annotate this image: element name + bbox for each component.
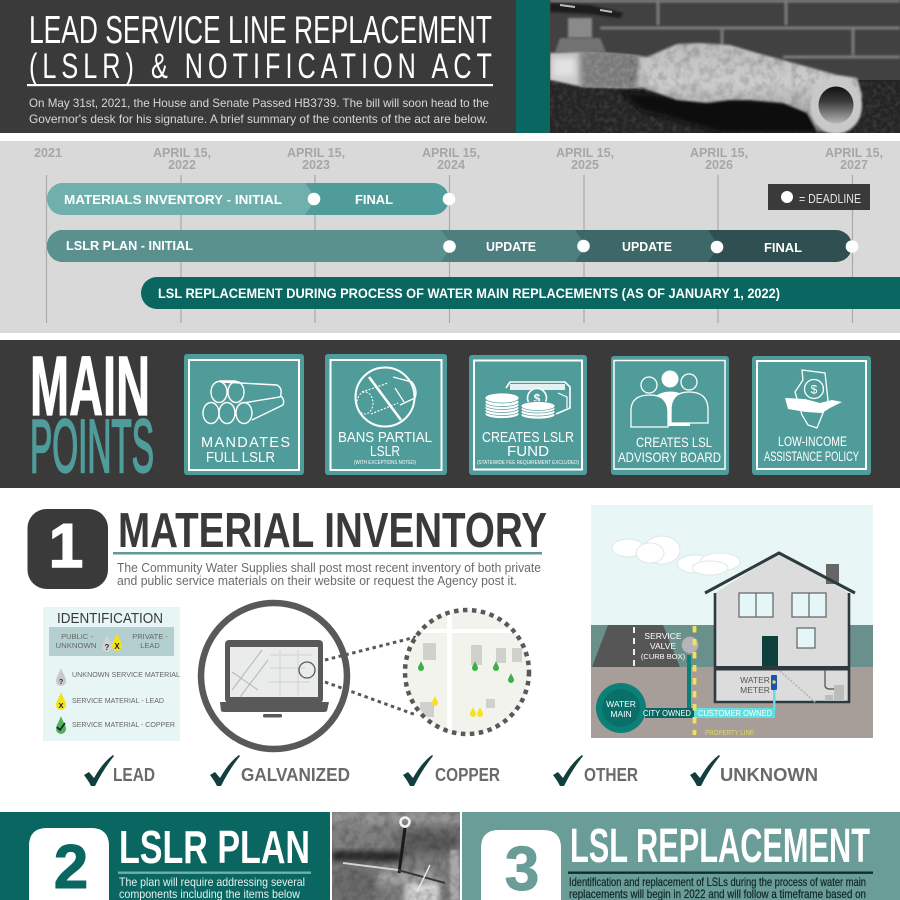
bar: LSLR plan: FINAL (764, 240, 802, 255)
heading: main points: MAIN (30, 339, 150, 433)
illustration: house service line diagram (591, 505, 873, 738)
road (592, 625, 680, 667)
legend: identification: X (114, 642, 120, 651)
icon: prohibited pipe (356, 368, 416, 426)
checklist: material types: GALVANIZED (241, 765, 350, 785)
timeline year labels: 2024 (437, 158, 465, 172)
connector: zoom lines (325, 637, 416, 715)
illustration: house service line diagram: WATER (740, 675, 770, 685)
card: mandates full LSLR: MANDATES (201, 435, 290, 451)
timeline year labels: APRIL 15, (556, 146, 614, 160)
diagram labels (606, 631, 772, 719)
house (715, 553, 849, 702)
legend: identification: ? (59, 677, 64, 686)
panel: main points: POINTS (30, 404, 154, 488)
card: creates LSLR fund: FUND (507, 444, 549, 460)
badge: number 1: 1 (49, 512, 83, 581)
card: creates LSLR fund (469, 355, 587, 475)
diagram labels: SERVICE (644, 631, 682, 641)
legend: deadline: = DEADLINE (799, 191, 861, 206)
icon: three people (631, 370, 708, 427)
card: bans partial LSLR: BANS PARTIAL (338, 430, 432, 446)
bar: LSL replacement (141, 277, 900, 309)
legend: identification: PRIVATE - (132, 632, 168, 641)
legend: identification (43, 607, 180, 741)
legend: identification: IDENTIFICATION (57, 610, 163, 627)
bar: LSLR plan: LSLR PLAN - INITIAL (66, 238, 193, 253)
legend: identification: X (58, 701, 64, 710)
water main (596, 683, 646, 733)
diagram labels: CITY OWNED (643, 708, 691, 718)
legend: identification: ? (105, 643, 110, 652)
panel: material inventory (28, 504, 873, 786)
clouds (612, 536, 740, 575)
map detail: dotted magnifier (405, 610, 530, 735)
diagram labels: VALVE (650, 641, 676, 651)
intro text: Governor's desk for his signature. A brief summary of the contents of the act are below. (29, 112, 488, 126)
title (27, 9, 493, 86)
timeline year labels (34, 146, 883, 172)
icon: state outline with hand and dollar: $ (811, 382, 818, 396)
legend: identification: SERVICE MATERIAL - COPPER (72, 720, 175, 729)
panel: header (0, 0, 900, 140)
heading: main points (30, 339, 154, 488)
diagram labels: CUSTOMER OWNED (698, 708, 772, 718)
panel: main points (0, 339, 900, 488)
diagram labels: (CURB BOX) (641, 652, 686, 661)
description text: and public service materials on their website or request the Agency post it. (117, 574, 517, 588)
bar: LSL replacement: LSL REPLACEMENT DURING PROCESS OF WATER MAIN REPLACEMENTS (AS OF JANUARY 1, 2022) (158, 285, 780, 301)
description text (119, 875, 305, 900)
icon: laptop with online map (201, 603, 347, 749)
badge: number 3 (481, 830, 561, 900)
description text: The plan will require addressing several (119, 875, 305, 889)
description text: The Community Water Supplies shall post most recent inventory of both private (117, 561, 541, 575)
checklist: material types: COPPER (435, 765, 500, 785)
title: LEAD SERVICE LINE REPLACEMENT (29, 9, 492, 52)
timeline year labels: 2025 (571, 158, 599, 172)
pipe opening (810, 78, 862, 134)
legend: identification: UNKNOWN (56, 641, 96, 650)
timeline year labels: 2026 (705, 158, 733, 172)
panel: timeline (0, 141, 900, 333)
card: creates LSLR fund: CREATES LSLR (482, 430, 574, 446)
bar: LSLR plan: UPDATE (486, 239, 536, 254)
timeline year labels: APRIL 15, (690, 146, 748, 160)
heading: LSLR plan: LSLR PLAN (119, 821, 310, 873)
icon: cash and coins: $ (534, 392, 541, 406)
illustration: house service line diagram: METER (740, 685, 770, 695)
faucet (568, 18, 592, 38)
photo: excavated service line (332, 812, 460, 900)
card: bans partial LSLR (325, 354, 447, 475)
checklist: material types (84, 755, 818, 786)
panel: LSL replacement (462, 812, 900, 900)
bar: materials inventory (47, 183, 455, 215)
legend: deadline (768, 184, 870, 210)
intro text (29, 96, 489, 126)
timeline year labels: APRIL 15, (153, 146, 211, 160)
card: low-income assistance policy (752, 356, 871, 475)
badge: number 2 (29, 828, 109, 900)
diagram labels: MAIN (610, 709, 632, 719)
title: (LSLR) & NOTIFICATION ACT (29, 47, 492, 86)
intro text: On May 31st, 2021, the House and Senate Passed HB3739. The bill will soon head to the (29, 96, 489, 110)
legend: identification: LEAD (140, 641, 160, 650)
water pipes (687, 655, 691, 710)
card: creates LSL advisory board: ADVISORY BOARD (618, 449, 721, 465)
timeline year labels: 2023 (302, 158, 330, 172)
legend: identification: UNKNOWN SERVICE MATERIAL (72, 670, 180, 679)
badge: number 1 (28, 509, 108, 589)
description text (569, 875, 866, 900)
legend: identification: PUBLIC - (61, 632, 93, 641)
bar: materials inventory: MATERIALS INVENTORY - INITIAL (64, 192, 282, 207)
heading: material inventory: MATERIAL INVENTORY (118, 504, 547, 558)
timeline year labels: APRIL 15, (825, 146, 883, 160)
card: bans partial LSLR: (WITH EXCEPTIONS NOTED) (354, 460, 416, 466)
bar: materials inventory: FINAL (355, 192, 393, 207)
card: low-income assistance policy: ASSISTANCE POLICY (764, 449, 859, 464)
timeline year labels: APRIL 15, (287, 146, 345, 160)
checklist: material types: OTHER (584, 765, 638, 785)
badge: number 2: 2 (54, 833, 88, 900)
photo: corroded lead pipe (550, 0, 900, 140)
bar: LSLR plan: UPDATE (622, 239, 672, 254)
card: creates LSL advisory board: CREATES LSL (636, 434, 712, 450)
card: creates LSLR fund: (STATEWIDE FEE REQUIREMENT EXCLUDED) (477, 460, 579, 466)
diagram labels: WATER (606, 699, 636, 709)
checklist: material types: LEAD (113, 765, 155, 785)
legend: identification: SERVICE MATERIAL - LEAD (72, 696, 164, 705)
icon: stacked pipes (203, 381, 284, 424)
card: mandates full LSLR (184, 354, 304, 475)
card: bans partial LSLR: LSLR (370, 444, 400, 460)
checklist: material types: UNKNOWN (720, 765, 818, 785)
pipe body (550, 43, 862, 132)
illustration: house service line diagram: PROPERTY LINE (705, 728, 754, 737)
timeline year labels: 2027 (840, 158, 868, 172)
bar: LSLR plan (47, 230, 858, 262)
timeline year labels: 2022 (168, 158, 196, 172)
card: low-income assistance policy: LOW-INCOME (778, 434, 847, 449)
card: mandates full LSLR: FULL LSLR (206, 450, 275, 466)
card: creates LSL advisory board (611, 356, 729, 475)
description text (117, 561, 541, 588)
panel: LSLR plan (0, 812, 330, 900)
timeline year labels: APRIL 15, (422, 146, 480, 160)
timeline year labels: 2021 (34, 146, 62, 160)
